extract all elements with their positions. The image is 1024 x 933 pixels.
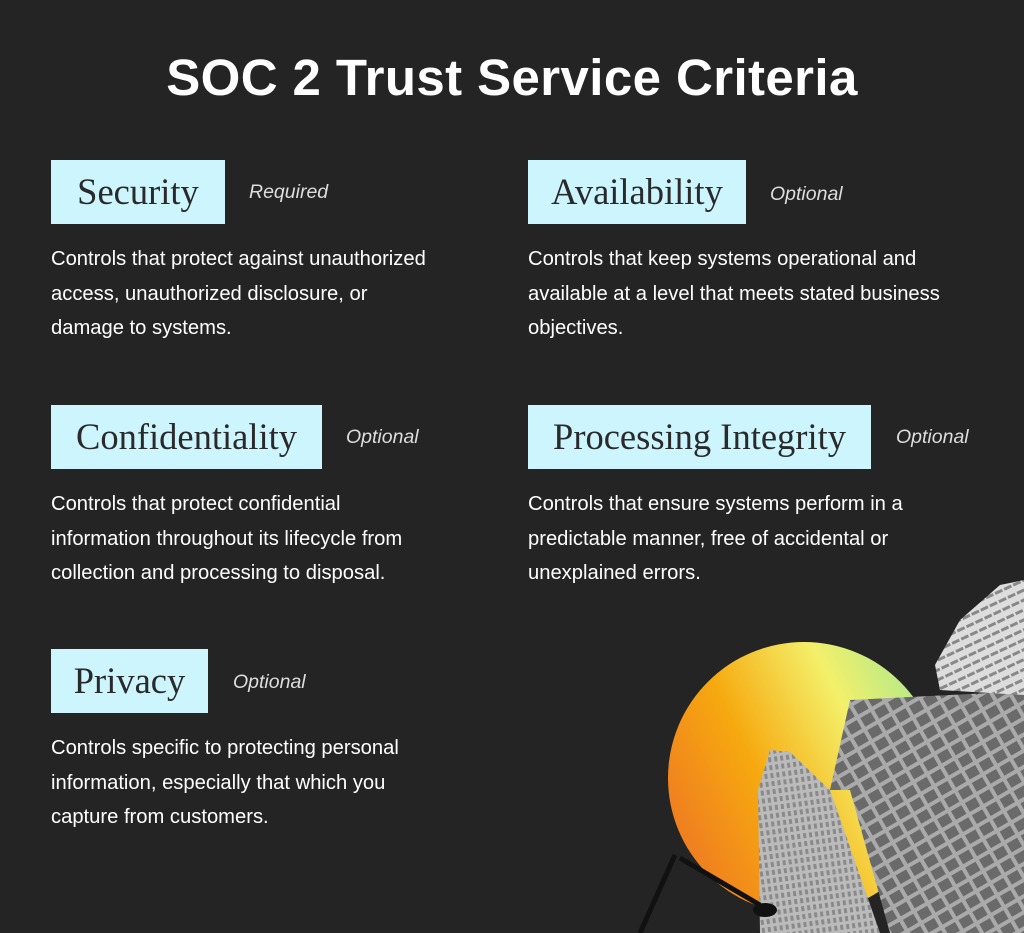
text: confidentiality description: Controls that protect confidential (51, 493, 341, 515)
label: security (51, 160, 225, 224)
tag: required: Required (249, 181, 328, 203)
panel: security (51, 160, 426, 339)
text: security description (51, 248, 426, 339)
text: privacy description: capture from customers. (51, 806, 269, 828)
text: privacy description: information, especially that which you (51, 772, 385, 794)
street lamp (640, 855, 760, 933)
label: processing integrity (528, 405, 871, 469)
tag: optional: Optional (896, 426, 969, 448)
text: availability description (528, 248, 940, 339)
text: processing integrity description (528, 493, 903, 584)
text: availability description: available at a level that meets stated business (528, 282, 940, 304)
text: processing integrity description: predictable manner, free of accidental or (528, 528, 888, 550)
text: privacy description: Controls specific to protecting personal (51, 737, 399, 759)
building: top right (935, 580, 1024, 695)
label: confidentiality (51, 405, 322, 469)
text: confidentiality description (51, 493, 402, 584)
tag: optional: Optional (346, 426, 419, 448)
label: availability (528, 160, 746, 224)
building: central tall tower (758, 750, 880, 933)
label: privacy: Privacy (74, 660, 185, 701)
text: security description: access, unauthorized disclosure, or (51, 282, 367, 304)
text: processing integrity description: Controls that ensure systems perform in a (528, 493, 903, 515)
label: privacy (51, 649, 208, 713)
text: security description: Controls that protect against unauthorized (51, 248, 426, 270)
label: processing integrity: Processing Integrity (553, 416, 846, 457)
text: availability description: Controls that keep systems operational and (528, 248, 916, 270)
panel: privacy (51, 649, 399, 828)
text: security description: damage to systems. (51, 317, 232, 339)
panel: availability (528, 160, 940, 339)
panel: confidentiality (51, 405, 419, 584)
label: availability: Availability (551, 171, 723, 212)
sun circle (668, 642, 940, 914)
building: right glass tower (830, 690, 1024, 933)
title: SOC 2 Trust Service Criteria (166, 49, 858, 106)
text: privacy description (51, 737, 399, 828)
text: availability description: objectives. (528, 317, 623, 339)
label: security: Security (77, 171, 199, 212)
label: confidentiality: Confidentiality (76, 416, 297, 457)
text: confidentiality description: information throughout its lifecycle from (51, 528, 402, 550)
panel: processing integrity (528, 405, 969, 584)
text: processing integrity description: unexplained errors. (528, 562, 701, 584)
tag: optional: Optional (233, 671, 306, 693)
text: confidentiality description: collection and processing to disposal. (51, 562, 385, 584)
tag: optional: Optional (770, 183, 843, 205)
